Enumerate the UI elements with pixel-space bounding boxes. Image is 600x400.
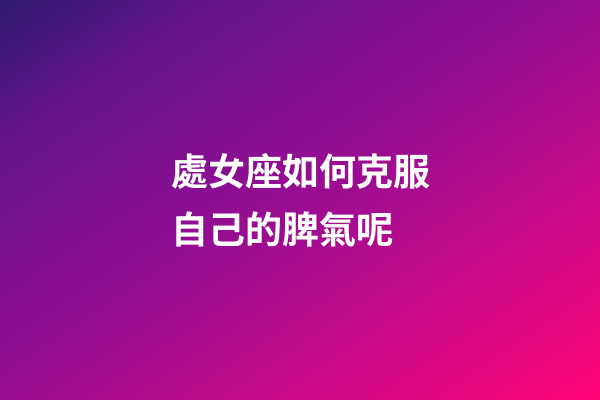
title: [171, 152, 430, 251]
title: 處女座如何克服: [171, 152, 430, 193]
title: 自己的脾氣呢: [171, 210, 393, 251]
